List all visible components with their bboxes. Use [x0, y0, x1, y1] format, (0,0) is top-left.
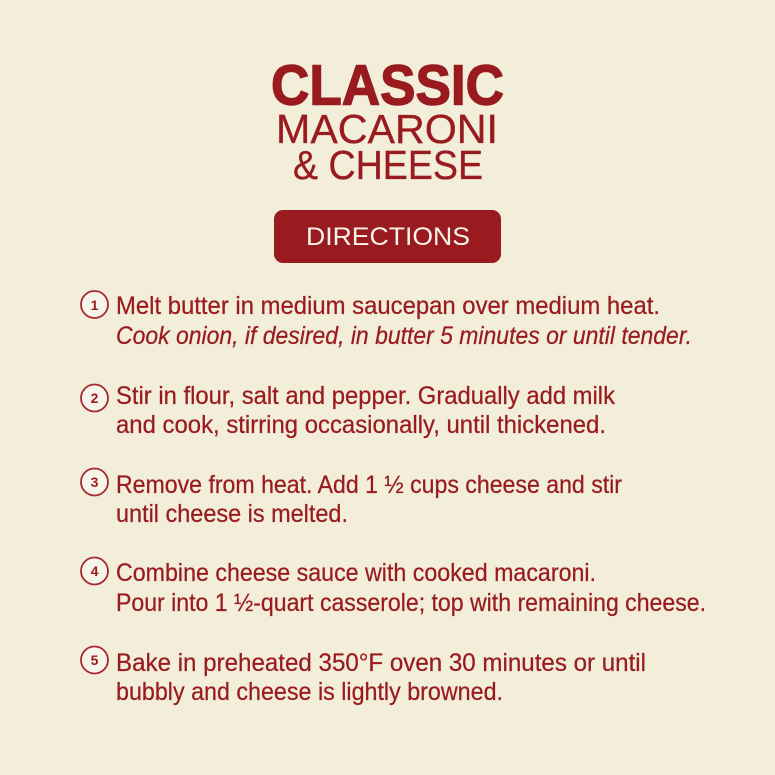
step 4: 4	[91, 563, 99, 579]
step 2: 2	[91, 390, 99, 406]
step 5: bubbly and cheese is lightly browned.	[116, 678, 503, 706]
step 5: 5	[91, 652, 99, 668]
step 4	[81, 558, 706, 617]
directions banner: DIRECTIONS	[306, 223, 470, 251]
step 1: Cook onion, if desired, in butter 5 minutes or until tender.	[116, 322, 692, 350]
step 2: and cook, stirring occasionally, until thickened.	[116, 411, 606, 439]
step 2: Stir in flour, salt and pepper. Gradually add milk	[116, 382, 615, 410]
step 1: 1	[91, 297, 99, 313]
step 4: Combine cheese sauce with cooked macaroni.	[116, 559, 596, 587]
title: MACARONI	[276, 106, 498, 152]
directions banner	[274, 210, 501, 263]
title: CLASSIC	[271, 54, 504, 118]
step 3: 3	[91, 474, 99, 490]
step 3: until cheese is melted.	[116, 500, 348, 528]
step 5	[81, 646, 646, 706]
step 1: Melt butter in medium saucepan over medium heat.	[116, 292, 660, 320]
step 3	[81, 468, 622, 528]
step 4: Pour into 1 ½-quart casserole; top with remaining cheese.	[116, 589, 706, 617]
step 3: Remove from heat. Add 1 ½ cups cheese and stir	[116, 471, 622, 499]
step 5: Bake in preheated 350°F oven 30 minutes or until	[116, 649, 646, 677]
title: & CHEESE	[293, 142, 483, 188]
step 2	[81, 382, 615, 439]
step 1	[81, 291, 692, 350]
title	[271, 54, 504, 188]
